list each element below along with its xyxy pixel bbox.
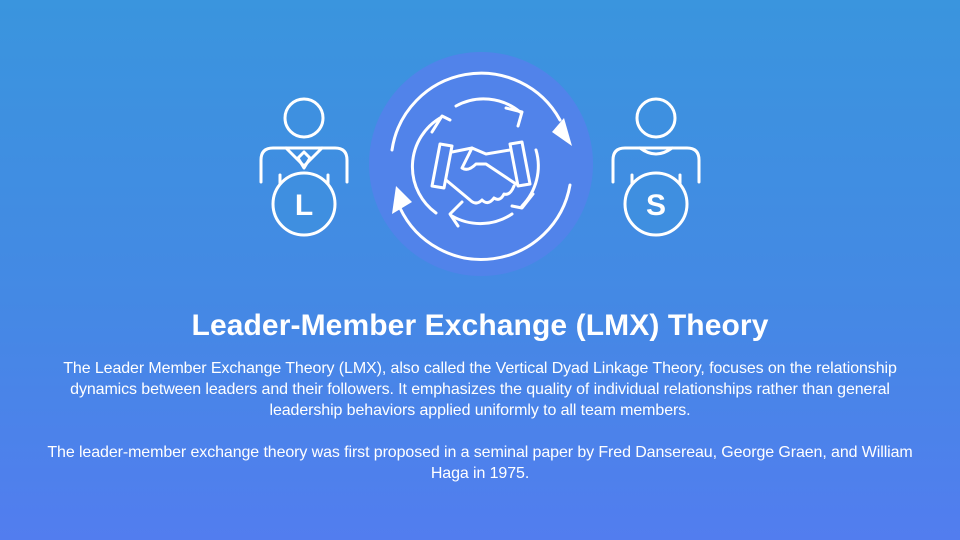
icon: exchange circle with handshake (369, 52, 593, 276)
icon: subordinate person: S (646, 189, 666, 222)
text block: description: The Leader Member Exchange Theory (LMX), also called the Vertical Dyad Linkage Theory, focuses on the relationship (63, 360, 897, 377)
text block: description: dynamics between leaders and their followers. It emphasizes the quality of individual relationships rather than general (70, 381, 890, 398)
text block: description (47, 360, 913, 482)
icon: leader person: L (295, 189, 313, 222)
title: Leader-Member Exchange (LMX) Theory (192, 309, 768, 342)
text block: description: leadership behaviors applied uniformly to all team members. (270, 402, 690, 419)
text block: description: Haga in 1975. (431, 465, 529, 482)
icon: subordinate person (613, 99, 699, 235)
icon: leader person (261, 99, 347, 235)
icon group: leader, exchange, subordinate (260, 52, 700, 276)
text block: description: The leader-member exchange theory was first proposed in a seminal paper by Fred Dansereau, George Graen, and William (47, 444, 913, 461)
